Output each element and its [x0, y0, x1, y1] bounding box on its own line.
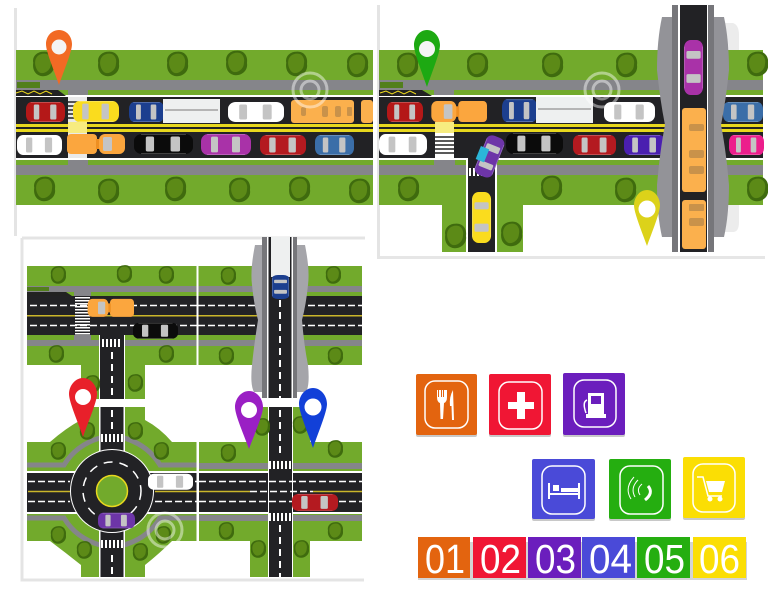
icon: green map pin [414, 30, 440, 87]
trees [33, 51, 370, 203]
vehicles [88, 237, 338, 528]
grass band [16, 50, 373, 205]
tile: roundabout [27, 407, 197, 577]
road cars [379, 97, 764, 243]
top lane cars [26, 99, 373, 123]
side road [466, 158, 497, 252]
icon: restaurant [416, 374, 477, 437]
icon: red map pin [69, 378, 97, 437]
sidewalks [379, 80, 763, 175]
grass band [379, 50, 763, 252]
number 05: 05 [644, 536, 685, 582]
roadway [16, 95, 373, 160]
icon: blue map pin [299, 388, 327, 448]
station marker [16, 82, 66, 96]
overpass vehicles [682, 40, 706, 249]
tile: four-way crossing [199, 407, 362, 577]
panel: numbered labels [418, 536, 747, 582]
roadway [379, 95, 763, 160]
icon: fuel station [563, 373, 625, 437]
icon: medical cross [489, 374, 551, 437]
trees [397, 52, 768, 248]
trees [49, 265, 343, 561]
icon: telephone signal [609, 459, 671, 521]
panel: junction types map [22, 237, 365, 580]
sidewalks [16, 80, 373, 175]
icon: shopping cart [683, 457, 745, 520]
number 01: 01 [425, 536, 465, 582]
panel: road with side road and overpass [377, 5, 768, 259]
icon: purple map pin [235, 391, 263, 449]
bottom lane cars [17, 134, 354, 155]
panel: straight road with traffic [14, 8, 373, 236]
tile: overpass crossing [198, 237, 362, 398]
crosswalk [68, 97, 87, 158]
icon: hotel bed [532, 459, 595, 521]
overpass bridge [657, 5, 739, 252]
icon: orange map pin [46, 30, 72, 85]
station marker [379, 82, 432, 96]
number 03: 03 [535, 536, 576, 582]
white separators [81, 266, 311, 542]
icon: yellow map pin [634, 190, 660, 246]
number 02: 02 [480, 536, 521, 582]
tile: T junction [27, 266, 197, 400]
number 06: 06 [699, 536, 740, 582]
crosswalks [435, 122, 490, 176]
panel: service icons [416, 373, 745, 521]
number 04: 04 [589, 536, 632, 582]
